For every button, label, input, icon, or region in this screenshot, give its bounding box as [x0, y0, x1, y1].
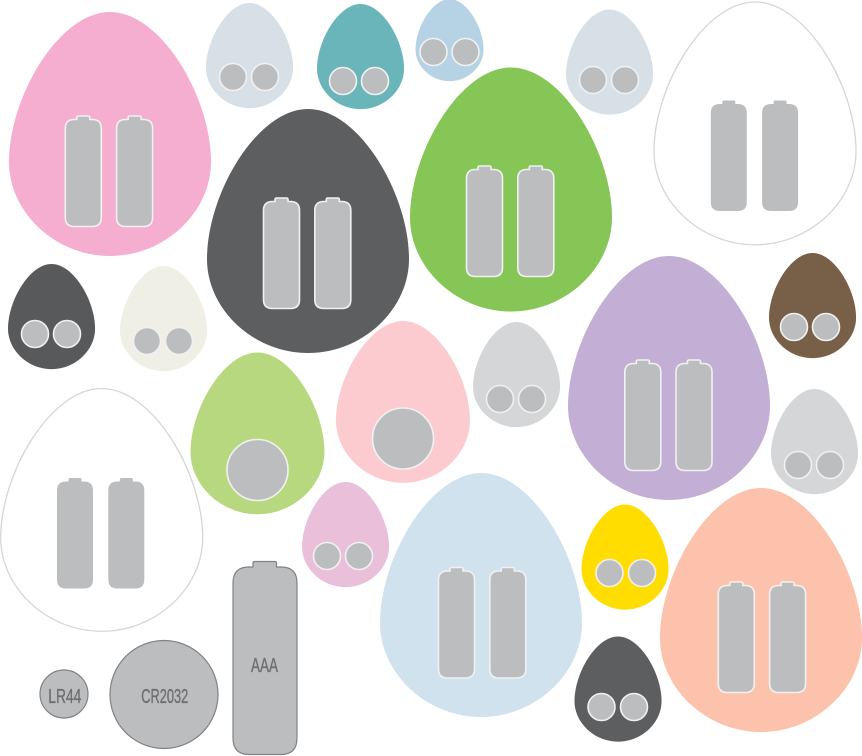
legend: CR2032 coin cell [110, 640, 218, 748]
legend: AAA battery [233, 562, 297, 754]
egg: pale grey-blue small, top [206, 3, 293, 108]
egg: mauve pink small [302, 482, 389, 587]
egg: peach with two AA batteries [660, 488, 862, 732]
egg: lime green with coin cell [190, 352, 324, 514]
egg: teal small [317, 4, 404, 109]
legend: AAA battery: AAA [251, 654, 278, 677]
legend: LR44 button cell: LR44 [48, 685, 81, 708]
egg: cream small [120, 266, 207, 371]
egg: dark grey with two AA batteries [207, 109, 409, 353]
egg: pink with two AA batteries [9, 12, 211, 256]
egg: brown small [769, 253, 856, 358]
egg: light grey small, right [771, 389, 858, 494]
egg: light blue small [416, 0, 484, 81]
egg: white outline with two AA batteries, top right [654, 2, 856, 245]
egg: dark grey small, left [8, 264, 95, 369]
legend: LR44 button cell [40, 670, 88, 718]
egg: purple with two AA batteries [568, 256, 770, 500]
egg: light pink with coin cell [336, 321, 470, 483]
egg: green with two AA batteries [410, 68, 612, 312]
egg: light grey small, centre [473, 322, 560, 427]
egg: pale blue with two AA batteries [380, 473, 582, 717]
legend: CR2032 coin cell: CR2032 [141, 685, 188, 708]
egg: pale grey-blue small, right [566, 10, 653, 115]
egg: dark grey small, bottom [574, 636, 662, 742]
egg: white outline with two AA batteries, left [1, 388, 203, 631]
egg: yellow small [582, 504, 669, 610]
